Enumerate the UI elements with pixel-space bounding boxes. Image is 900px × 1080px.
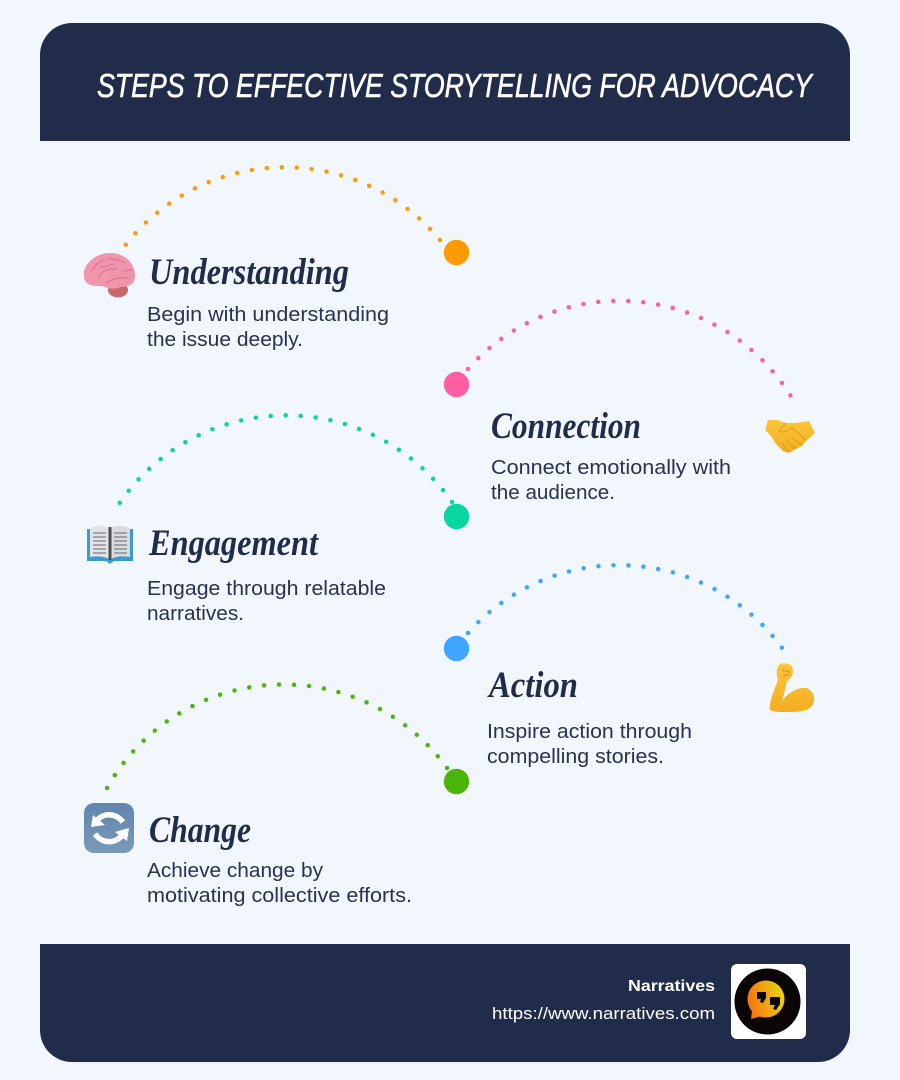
step 1: understanding	[84, 167, 469, 351]
marker: pink	[444, 372, 469, 397]
icon: refresh arrows	[84, 803, 134, 853]
footer name: Narratives	[628, 978, 715, 995]
description	[147, 860, 412, 907]
step 3: engagement	[87, 415, 469, 625]
description	[487, 721, 692, 768]
description: motivating collective efforts.	[147, 885, 412, 907]
logo	[731, 964, 806, 1039]
description	[147, 578, 386, 625]
marker: teal	[444, 504, 469, 529]
description: the audience.	[491, 482, 615, 504]
description: the issue deeply.	[147, 329, 303, 351]
dotted arc: pink	[468, 301, 792, 398]
step 4: action	[444, 565, 814, 768]
dotted arc: orange	[124, 167, 440, 247]
heading: Engagement	[148, 523, 319, 564]
heading: Change	[149, 810, 251, 851]
step 5: change	[84, 684, 469, 907]
description	[147, 304, 389, 351]
footer url: https://www.narratives.com	[492, 1004, 715, 1023]
description: Engage through relatable	[147, 578, 386, 600]
description: compelling stories.	[487, 746, 664, 768]
marker: green	[444, 769, 469, 794]
description: Achieve change by	[147, 860, 323, 882]
icon: brain	[84, 253, 135, 298]
icon: handshake	[765, 420, 815, 453]
header band	[40, 23, 850, 141]
footer band	[40, 944, 850, 1062]
step 2: connection	[444, 301, 815, 504]
heading: Understanding	[149, 252, 349, 293]
heading: Action	[487, 665, 578, 706]
dotted arc: green	[107, 684, 447, 788]
description	[491, 457, 731, 504]
dotted arc: teal	[115, 415, 452, 510]
dotted arc: blue	[468, 565, 785, 652]
marker: orange	[444, 240, 469, 265]
description: Begin with understanding	[147, 304, 389, 326]
icon: flexed biceps	[770, 663, 814, 712]
description: narratives.	[147, 603, 244, 625]
description: Inspire action through	[487, 721, 692, 743]
icon: open book	[87, 526, 133, 564]
heading: Connection	[491, 406, 641, 447]
description: Connect emotionally with	[491, 457, 731, 479]
marker: blue	[444, 636, 469, 661]
